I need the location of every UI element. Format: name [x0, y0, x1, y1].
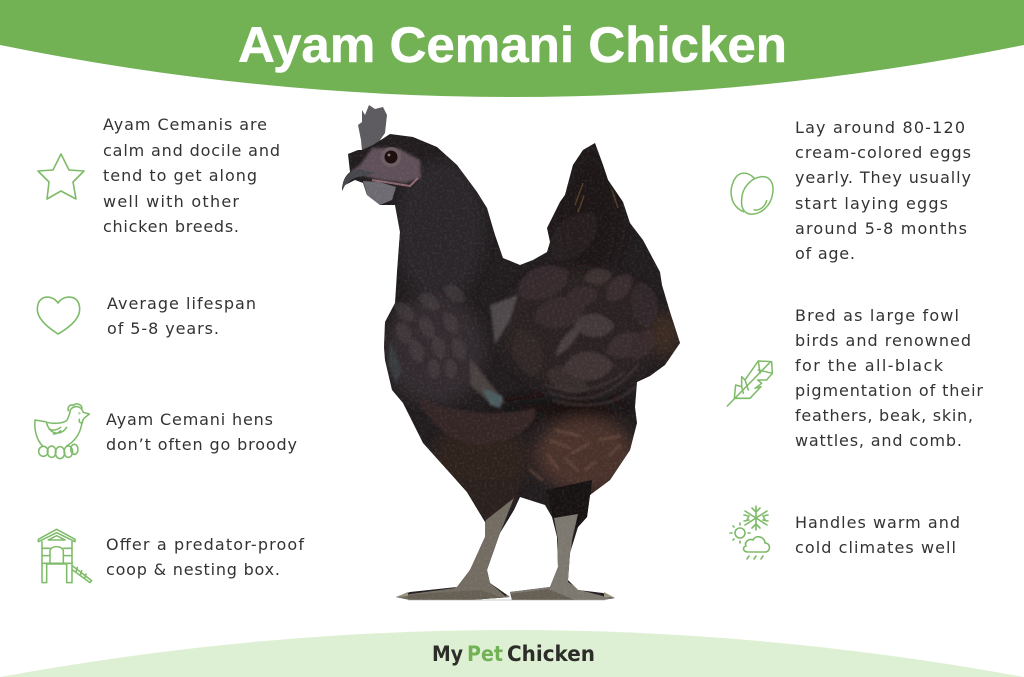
toe claws — [396, 592, 615, 598]
logo: My Pet Chicken: Chicken — [507, 642, 595, 666]
text: lifespan: Average lifespan — [107, 294, 256, 313]
text: breed traits: wattles, and comb. — [795, 431, 962, 450]
left column — [35, 115, 304, 583]
text: temperament — [103, 115, 280, 236]
feet shading — [405, 589, 575, 600]
text: egg laying: Lay around 80-120 — [795, 118, 965, 137]
lower wing — [418, 398, 536, 445]
saddle feathers — [514, 213, 658, 407]
ground shadow — [408, 599, 605, 601]
abdomen fluff — [530, 430, 620, 480]
logo: My Pet Chicken: Pet — [467, 642, 503, 666]
breast feathers — [394, 285, 466, 378]
icon: feather — [727, 361, 772, 406]
text: breed traits: feathers, beak, skin, — [795, 406, 973, 425]
text: breed traits: pigmentation of their — [795, 381, 983, 400]
text: broodiness: Ayam Cemani hens — [106, 410, 273, 429]
text: climate — [795, 513, 960, 557]
text: broodiness: don’t often go broody — [106, 435, 297, 454]
text: egg laying: cream-colored eggs — [795, 143, 971, 162]
thighs — [546, 480, 592, 530]
wattle — [363, 181, 396, 205]
icon: eggs — [731, 173, 773, 214]
eye — [381, 147, 401, 167]
face — [350, 148, 421, 183]
text: egg laying: yearly. They usually — [795, 168, 971, 187]
text: temperament: tend to get along — [103, 166, 257, 185]
right column — [727, 118, 983, 559]
text: temperament: chicken breeds. — [103, 217, 239, 236]
text: housing — [106, 535, 304, 579]
text: broodiness — [106, 410, 297, 454]
icon: heart — [37, 297, 80, 334]
title: Ayam Cemani Chicken — [238, 17, 787, 73]
right leg — [505, 514, 618, 600]
text: housing: Offer a predator-proof — [106, 535, 304, 554]
left leg — [395, 498, 514, 600]
tail highlights — [575, 183, 618, 212]
text: temperament: well with other — [103, 192, 239, 211]
text: breed traits: for the all-black — [795, 356, 944, 375]
feather texture — [345, 134, 679, 600]
icon: weather — [730, 506, 770, 559]
chicken body — [330, 130, 690, 610]
icon: nesting hen — [35, 404, 89, 459]
header banner — [0, 0, 1024, 97]
text: temperament: Ayam Cemanis are — [103, 115, 267, 134]
text: egg laying: around 5-8 months — [795, 219, 967, 238]
text: egg laying — [795, 118, 971, 263]
text: breed traits — [795, 306, 983, 450]
text: lifespan: of 5-8 years. — [107, 319, 219, 338]
text: breed traits: Bred as large fowl — [795, 306, 959, 325]
text: climate: cold climates well — [795, 538, 956, 557]
icon: star — [38, 154, 84, 199]
text: temperament: calm and docile and — [103, 141, 280, 160]
text: climate: Handles warm and — [795, 513, 960, 532]
logo: My Pet Chicken — [432, 642, 595, 666]
footer banner — [0, 630, 1024, 677]
chicken photo illustration — [330, 105, 690, 610]
iridescent highlights — [388, 295, 518, 408]
text: egg laying: start laying eggs — [795, 194, 948, 213]
text: egg laying: of age. — [795, 244, 855, 263]
logo: My Pet Chicken: My — [432, 642, 463, 666]
icon: coop — [38, 529, 92, 583]
comb — [358, 105, 387, 151]
text: breed traits: birds and renowned — [795, 331, 971, 350]
text: housing: coop & nesting box. — [106, 560, 280, 579]
text: lifespan — [107, 294, 256, 338]
beak — [342, 169, 376, 191]
